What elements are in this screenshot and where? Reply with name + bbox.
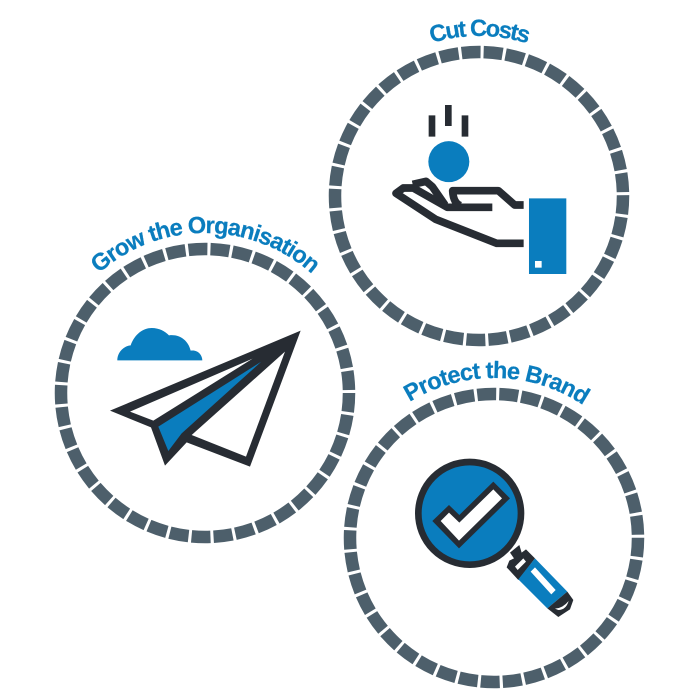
icon: paper plane	[110, 331, 301, 467]
heading: Grow the Organisation: Grow the Organisation	[92, 216, 318, 274]
icon: magnifier with check mark	[418, 462, 573, 617]
icon: cloud	[117, 328, 202, 360]
dashed ring: Grow the Organisation	[61, 249, 349, 537]
icon: coin dropping into hand	[396, 105, 566, 274]
panel: Protect the Brand	[344, 360, 644, 688]
panel: Grow the Organisation	[54, 216, 356, 544]
heading: Protect the Brand: Protect the Brand	[402, 360, 591, 404]
dashed ring: Protect the Brand	[350, 394, 638, 682]
heading: Cut Costs: Cut Costs	[430, 19, 530, 42]
dashed ring: Cut Costs	[335, 52, 623, 340]
panel: Cut Costs	[328, 19, 630, 346]
